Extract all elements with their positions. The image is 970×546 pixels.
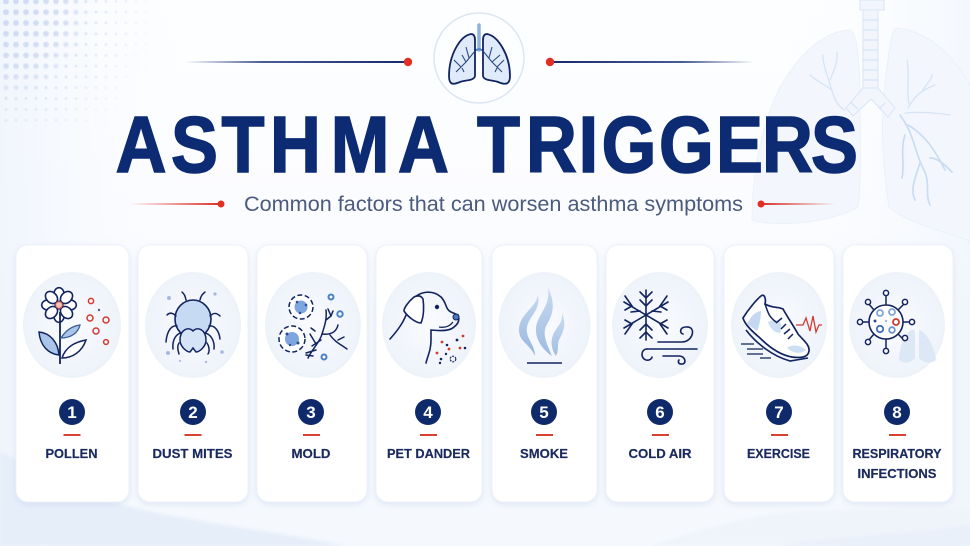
- icon: snowflake and wind: [624, 290, 697, 364]
- number badge 8: 8: [892, 403, 902, 422]
- subtitle: [130, 193, 835, 216]
- label: PET DANDER: [387, 446, 471, 461]
- icon: flower with pollen: [39, 288, 109, 364]
- icon: mold spores: [279, 294, 347, 360]
- large background lungs illustration: [752, 0, 970, 241]
- panel: respiratory infections: [843, 245, 953, 502]
- label: POLLEN: [46, 446, 98, 461]
- number badge 2: 2: [188, 403, 198, 422]
- number badge 6: [647, 399, 673, 425]
- label: INFECTIONS: [858, 466, 937, 481]
- label: DUST MITES: [152, 446, 233, 461]
- label: MOLD: [292, 446, 330, 461]
- number badge 2: [180, 399, 206, 425]
- number badge 3: 3: [306, 403, 316, 422]
- panel: smoke: [492, 245, 597, 502]
- number badge 4: 4: [423, 403, 433, 422]
- panel: pollen: [16, 245, 129, 502]
- label: EXERCISE: [747, 446, 810, 461]
- number badge 4: [415, 399, 441, 425]
- number badge 3: [298, 399, 324, 425]
- panel: dust mites: [138, 245, 248, 502]
- label: RESPIRATORY: [852, 446, 942, 461]
- panel: pet dander: [376, 245, 482, 502]
- number badge 5: [531, 399, 557, 425]
- icon: virus with lungs: [857, 290, 936, 363]
- subtitle: Common factors that can worsen asthma symptoms: [244, 193, 743, 216]
- icon: running shoe: [741, 295, 822, 361]
- panel: exercise: [724, 245, 834, 502]
- number badge 7: [766, 399, 792, 425]
- label: COLD AIR: [628, 446, 692, 461]
- panel: mold: [257, 245, 367, 502]
- label: SMOKE: [520, 446, 568, 461]
- icon: dust mite: [166, 292, 224, 363]
- icon: lungs medallion: [434, 13, 524, 103]
- top divider lines: [185, 58, 754, 66]
- number badge 5: 5: [539, 403, 549, 422]
- title: ASTHMA TRIGGERS: [116, 100, 858, 189]
- panel: cold air: [606, 245, 714, 502]
- number badge 1: [59, 399, 85, 425]
- number badge 6: 6: [655, 403, 665, 422]
- label: [852, 446, 942, 481]
- number badge 8: [884, 399, 910, 425]
- icon: dog with dander: [390, 292, 466, 364]
- icon: smoke wisps: [519, 288, 564, 363]
- number badge 1: 1: [67, 403, 77, 422]
- number badge 7: 7: [774, 403, 784, 422]
